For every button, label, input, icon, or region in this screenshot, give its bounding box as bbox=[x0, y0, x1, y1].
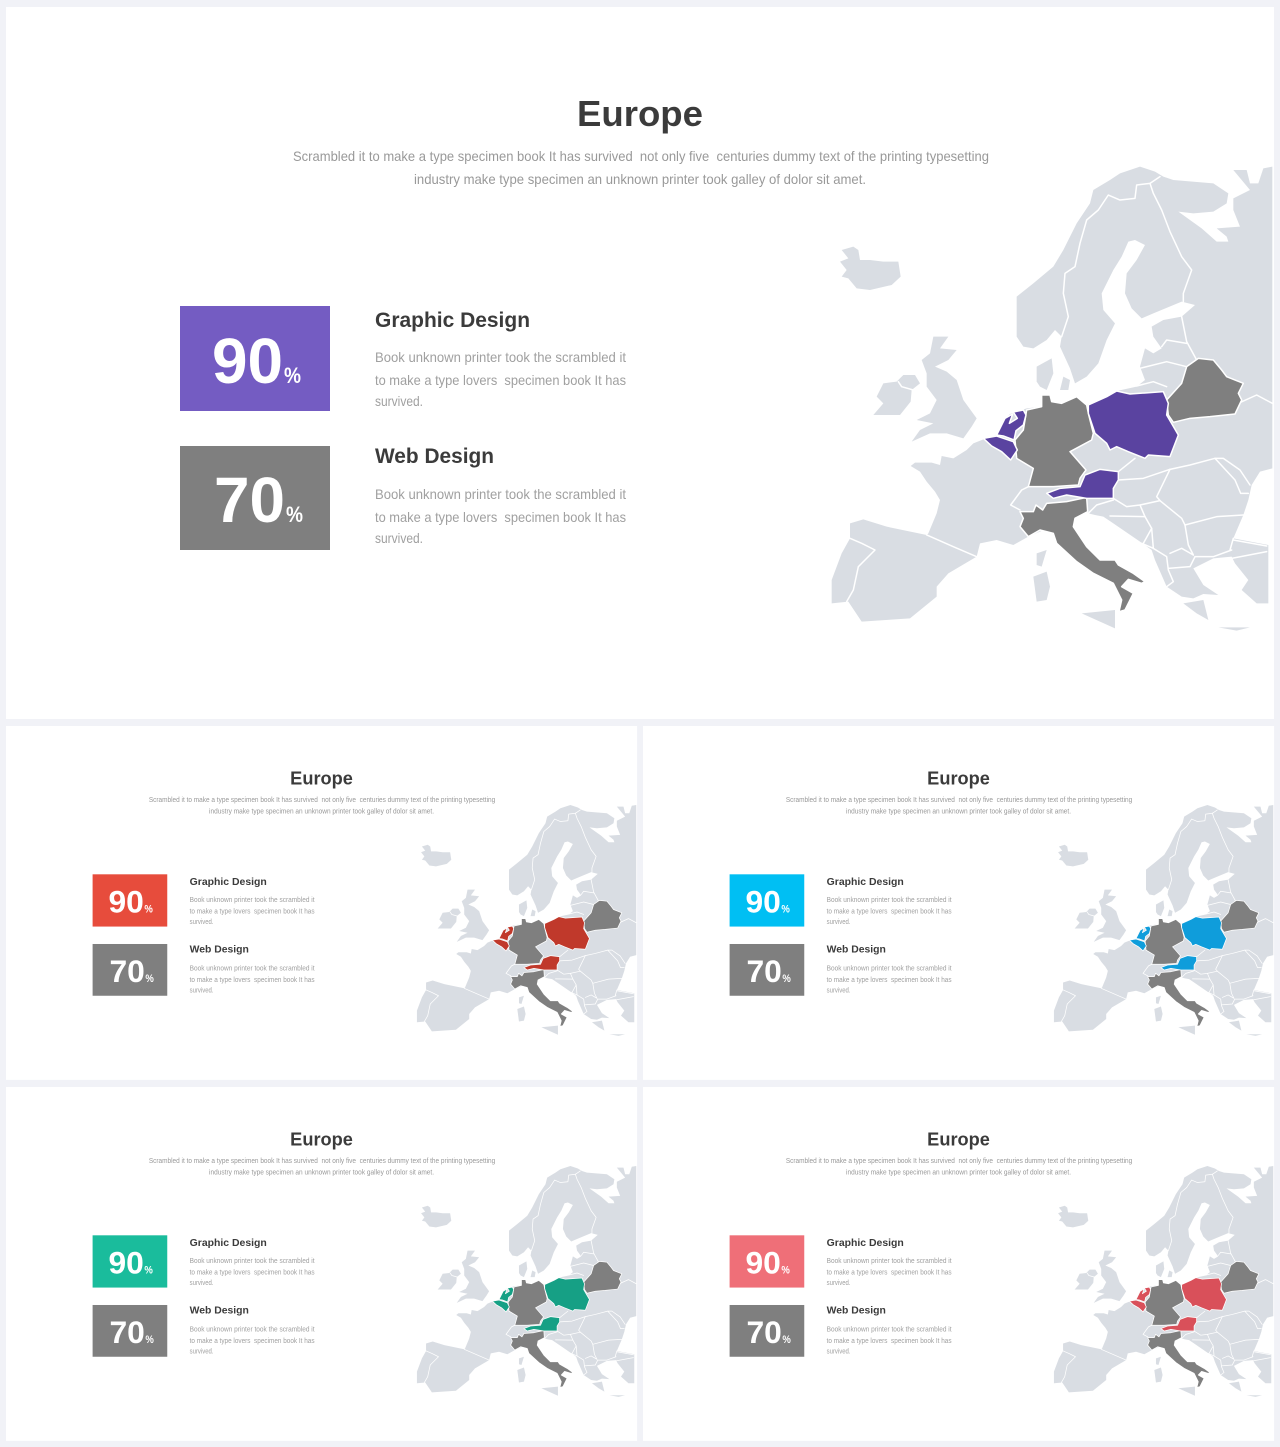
text block: Graphic Design: Book unknown printer took the scrambled it bbox=[190, 1258, 315, 1265]
stat box: 90%: % bbox=[144, 1265, 153, 1277]
stat box: 70%: % bbox=[782, 1334, 791, 1346]
stat box: 90% bbox=[730, 1235, 804, 1288]
map of Europe, teal highlights bbox=[417, 1166, 636, 1397]
stat box: 70%: 70 bbox=[747, 1314, 782, 1350]
text block: Graphic Design: Book unknown printer took the scrambled it bbox=[827, 1258, 952, 1265]
text block: Web Design: to make a type lovers specimen book It has bbox=[190, 977, 315, 984]
panel: small Europe slide, blue bbox=[643, 726, 1274, 1080]
text block: Graphic Design: Graphic Design bbox=[827, 1238, 904, 1249]
text block: Web Design: Book unknown printer took the scrambled it bbox=[190, 965, 315, 972]
text block: Graphic Design: to make a type lovers specimen book It has bbox=[827, 909, 952, 916]
stat box: 70%: 70 bbox=[110, 1314, 145, 1350]
stat box: 70%: % bbox=[782, 973, 791, 985]
title: Europe bbox=[577, 93, 703, 134]
text block: Web Design: Web Design bbox=[190, 1305, 249, 1316]
text block: Graphic Design: to make a type lovers specimen book It has bbox=[827, 1270, 952, 1277]
text block: Graphic Design: survived. bbox=[190, 1280, 214, 1287]
stat box: 70%: 70 bbox=[214, 464, 285, 536]
subtitle: industry make type specimen an unknown printer took galley of dolor sit amet. bbox=[209, 1170, 434, 1177]
text block: Web Design bbox=[827, 1305, 952, 1355]
text block: Web Design: Web Design bbox=[827, 944, 886, 955]
text block: Web Design: survived. bbox=[190, 987, 214, 994]
text block: Web Design: to make a type lovers specimen book It has bbox=[190, 1338, 315, 1345]
text block: Graphic Design: survived. bbox=[375, 393, 423, 409]
stat box: 90% bbox=[93, 874, 167, 927]
text block: Web Design bbox=[190, 944, 315, 994]
title: Europe bbox=[290, 769, 353, 789]
text block: Web Design: to make a type lovers specimen book It has bbox=[375, 509, 626, 525]
subtitle: Scrambled it to make a type specimen book It has survived not only five centuries dummy text of the printing typesetting bbox=[786, 1158, 1132, 1165]
text block: Graphic Design: Graphic Design bbox=[827, 877, 904, 888]
subtitle: Scrambled it to make a type specimen book It has survived not only five centuries dummy text of the printing typesetting bbox=[149, 1158, 495, 1165]
panel: small Europe slide, teal bbox=[6, 1087, 637, 1441]
stat box: 90% bbox=[93, 1235, 167, 1288]
stat box: 90%: 90 bbox=[109, 1245, 144, 1281]
text block: Web Design bbox=[375, 445, 626, 546]
text block: Graphic Design: to make a type lovers specimen book It has bbox=[190, 1270, 315, 1277]
text block: Graphic Design: Book unknown printer took the scrambled it bbox=[827, 897, 952, 904]
stat box: 90% bbox=[730, 874, 804, 927]
text block: Graphic Design: Graphic Design bbox=[190, 877, 267, 888]
text block: Web Design: Book unknown printer took the scrambled it bbox=[375, 486, 626, 502]
stat box: 90%: 90 bbox=[212, 325, 283, 397]
title: Europe bbox=[927, 769, 990, 789]
subtitle: industry make type specimen an unknown printer took galley of dolor sit amet. bbox=[414, 171, 866, 187]
panel: large Europe slide, purple bbox=[6, 7, 1274, 719]
text block: Graphic Design bbox=[190, 1238, 315, 1287]
text block: Graphic Design: Graphic Design bbox=[190, 1238, 267, 1249]
text block: Web Design bbox=[190, 1305, 315, 1355]
text block: Web Design: Book unknown printer took the scrambled it bbox=[827, 1326, 952, 1333]
text block: Graphic Design: survived. bbox=[190, 919, 214, 926]
stat box: 70%: 70 bbox=[747, 953, 782, 989]
stat box: 90%: 90 bbox=[746, 884, 781, 920]
subtitle: industry make type specimen an unknown printer took galley of dolor sit amet. bbox=[846, 809, 1071, 816]
stat box: 90%: % bbox=[781, 904, 790, 916]
stat box: 90%: 90 bbox=[109, 884, 144, 920]
text block: Web Design: survived. bbox=[827, 987, 851, 994]
stat box: 70% bbox=[93, 1305, 167, 1357]
subtitle: industry make type specimen an unknown printer took galley of dolor sit amet. bbox=[846, 1170, 1071, 1177]
text block: Web Design: survived. bbox=[827, 1348, 851, 1355]
text block: Graphic Design bbox=[375, 309, 626, 409]
stat box: 70%: 70 bbox=[110, 953, 145, 989]
stat box: 90%: 90 bbox=[746, 1245, 781, 1281]
text block: Graphic Design bbox=[827, 877, 952, 926]
text block: Graphic Design: Book unknown printer took the scrambled it bbox=[375, 349, 626, 365]
subtitle: Scrambled it to make a type specimen book It has survived not only five centuries dummy text of the printing typesetting bbox=[786, 797, 1132, 804]
text block: Graphic Design: to make a type lovers specimen book It has bbox=[375, 372, 626, 388]
stat box: 70% bbox=[180, 446, 330, 550]
text block: Web Design: survived. bbox=[375, 530, 423, 546]
stat box: 90%: % bbox=[144, 904, 153, 916]
map of Europe, purple highlights bbox=[832, 167, 1272, 631]
title: Europe bbox=[290, 1130, 353, 1150]
text block: Graphic Design: Graphic Design bbox=[375, 309, 530, 332]
stat box: 70% bbox=[93, 944, 167, 996]
text block: Web Design: Web Design bbox=[827, 1305, 886, 1316]
stat box: 70%: % bbox=[286, 502, 303, 527]
text block: Web Design: Book unknown printer took the scrambled it bbox=[190, 1326, 315, 1333]
subtitle bbox=[149, 1158, 495, 1177]
stat box: 70% bbox=[730, 944, 804, 996]
subtitle: Scrambled it to make a type specimen book It has survived not only five centuries dummy text of the printing typesetting bbox=[293, 148, 989, 164]
text block: Web Design: survived. bbox=[190, 1348, 214, 1355]
text block: Web Design: Web Design bbox=[375, 445, 494, 468]
stat box: 70%: % bbox=[145, 1334, 154, 1346]
text block: Web Design bbox=[827, 944, 952, 994]
subtitle bbox=[149, 797, 495, 816]
subtitle bbox=[293, 148, 989, 187]
text block: Graphic Design: to make a type lovers specimen book It has bbox=[190, 909, 315, 916]
title: Europe bbox=[927, 1130, 990, 1150]
stat box: 90%: % bbox=[781, 1265, 790, 1277]
map of Europe, red highlights bbox=[417, 805, 636, 1036]
stat box: 90% bbox=[180, 306, 330, 411]
text block: Web Design: to make a type lovers specimen book It has bbox=[827, 1338, 952, 1345]
stat box: 90%: % bbox=[284, 363, 301, 388]
stat box: 70%: % bbox=[145, 973, 154, 985]
stat box: 70% bbox=[730, 1305, 804, 1357]
subtitle bbox=[786, 1158, 1132, 1177]
subtitle: Scrambled it to make a type specimen book It has survived not only five centuries dummy text of the printing typesetting bbox=[149, 797, 495, 804]
text block: Web Design: Web Design bbox=[190, 944, 249, 955]
text block: Graphic Design: Book unknown printer took the scrambled it bbox=[190, 897, 315, 904]
map of Europe, pink highlights bbox=[1054, 1166, 1273, 1397]
text block: Web Design: to make a type lovers specimen book It has bbox=[827, 977, 952, 984]
subtitle bbox=[786, 797, 1132, 816]
text block: Graphic Design: survived. bbox=[827, 919, 851, 926]
panel: small Europe slide, red bbox=[6, 726, 637, 1080]
map of Europe, blue highlights bbox=[1054, 805, 1273, 1036]
text block: Web Design: Book unknown printer took the scrambled it bbox=[827, 965, 952, 972]
panel: small Europe slide, pink bbox=[643, 1087, 1274, 1441]
text block: Graphic Design bbox=[190, 877, 315, 926]
subtitle: industry make type specimen an unknown printer took galley of dolor sit amet. bbox=[209, 809, 434, 816]
text block: Graphic Design bbox=[827, 1238, 952, 1287]
text block: Graphic Design: survived. bbox=[827, 1280, 851, 1287]
